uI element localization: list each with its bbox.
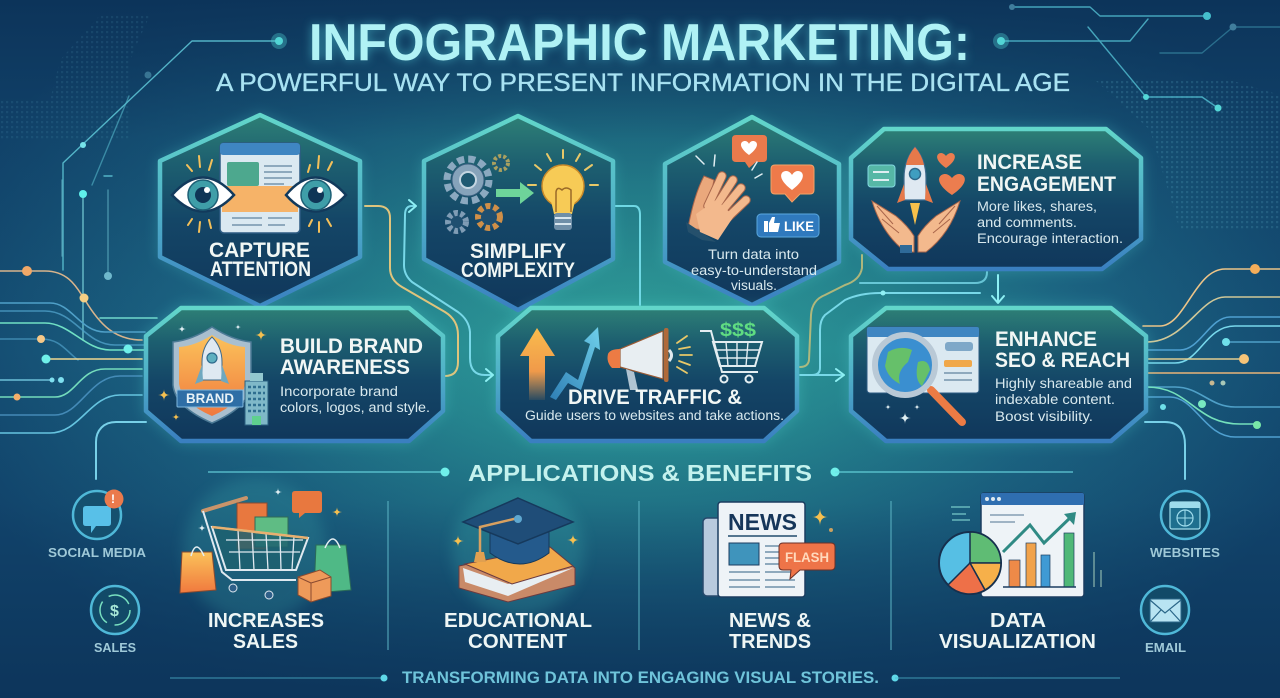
circuit lines: right side bbox=[1143, 264, 1280, 479]
section heading: applications and benefits bbox=[208, 460, 1073, 486]
icon: browser window with eyes bbox=[172, 143, 346, 233]
heading: INCREASE bbox=[977, 151, 1082, 174]
label: websites: WEBSITES bbox=[1150, 545, 1220, 560]
heading: BUILD BRAND bbox=[280, 335, 423, 358]
label: sales: SALES bbox=[94, 640, 136, 655]
circuit lines: left side bbox=[0, 180, 157, 479]
icon: brand shield with rocket bbox=[158, 324, 268, 425]
icon: rocket and hands bbox=[868, 147, 965, 253]
panel: turn data into visuals bbox=[663, 115, 841, 307]
heading line 2: AWARENESS bbox=[280, 356, 410, 379]
icon: gears and light bulb bbox=[447, 150, 598, 231]
label: increases sales: SALES bbox=[233, 631, 298, 653]
panel: build brand awareness bbox=[143, 305, 446, 444]
label: increases sales: INCREASES bbox=[208, 610, 324, 632]
body text bbox=[691, 247, 817, 293]
icon: megaphone bbox=[608, 328, 692, 390]
heading line 2: ENGAGEMENT bbox=[977, 173, 1116, 196]
heading: CAPTURE bbox=[209, 239, 310, 262]
icon: newspaper with flash bubble bbox=[703, 502, 835, 597]
heading: DRIVE TRAFFIC & bbox=[568, 386, 742, 409]
label: data visualization: VISUALIZATION bbox=[939, 631, 1096, 653]
heading line 2: ATTENTION bbox=[210, 258, 311, 281]
label: data visualization: DATA bbox=[990, 610, 1046, 632]
body text: Incorporate brand bbox=[280, 384, 398, 399]
body text: Turn data into bbox=[708, 247, 799, 262]
body text: Boost visibility. bbox=[995, 409, 1093, 424]
label: educational content: CONTENT bbox=[468, 631, 567, 653]
icon: email circle bbox=[1141, 586, 1189, 634]
icon: up arrow and trend bbox=[520, 327, 600, 400]
icon: social media circle: ! bbox=[111, 492, 115, 506]
label: news and trends: TRENDS bbox=[729, 631, 811, 653]
icon: graduation cap on book bbox=[452, 484, 584, 616]
heading: SIMPLIFY bbox=[470, 240, 566, 263]
heading line 2: COMPLEXITY bbox=[461, 259, 575, 282]
body text: More likes, shares, bbox=[977, 199, 1097, 214]
section heading: applications and benefits: APPLICATIONS & BENEFITS bbox=[468, 460, 812, 486]
icon: websites circle bbox=[1161, 491, 1209, 539]
label: email: EMAIL bbox=[1145, 640, 1186, 655]
body text: Encourage interaction. bbox=[977, 231, 1123, 246]
body text: colors, logos, and style. bbox=[280, 400, 430, 415]
subtitle: A POWERFUL WAY TO PRESENT INFORMATION IN THE DIGITAL AGE bbox=[216, 69, 1070, 97]
body text: Highly shareable and bbox=[995, 376, 1132, 391]
tagline bbox=[170, 668, 1120, 687]
body text: and comments. bbox=[977, 215, 1077, 230]
heading: ENHANCE bbox=[995, 328, 1097, 351]
dollar signs: $$$ bbox=[720, 320, 756, 341]
panel: capture attention bbox=[158, 113, 362, 308]
body text: Guide users to websites and take actions. bbox=[525, 408, 784, 423]
panel: increase engagement bbox=[848, 126, 1144, 272]
brand label: BRAND bbox=[186, 390, 234, 406]
body text bbox=[280, 384, 430, 415]
body text bbox=[977, 199, 1123, 246]
icon: shopping cart and bags bbox=[180, 478, 351, 622]
icon: social media circle bbox=[73, 490, 124, 539]
circuit lines: top right bbox=[993, 4, 1280, 112]
body text: visuals. bbox=[731, 278, 777, 293]
panel: drive traffic bbox=[495, 305, 800, 444]
icon: shopping cart with dollars bbox=[700, 320, 762, 382]
tagline: TRANSFORMING DATA INTO ENGAGING VISUAL STORIES. bbox=[402, 668, 879, 687]
icon: sales circle: $ bbox=[110, 603, 119, 620]
body text: easy-to-understand bbox=[691, 263, 817, 278]
title: INFOGRAPHIC MARKETING: bbox=[309, 14, 970, 72]
icon: dashboard chart with pie bbox=[939, 493, 1101, 597]
icon: clapping hands, hearts, like bbox=[686, 135, 819, 242]
panel: enhance seo and reach bbox=[848, 305, 1149, 444]
connector arrows between panels bbox=[365, 200, 1004, 381]
label: social media: SOCIAL MEDIA bbox=[48, 545, 147, 560]
label: educational content bbox=[444, 610, 592, 653]
icon: browser and magnifying globe bbox=[867, 327, 979, 424]
flash label: FLASH bbox=[785, 549, 829, 565]
body text: indexable content. bbox=[995, 392, 1115, 407]
like label: LIKE bbox=[784, 219, 814, 234]
label: news and trends bbox=[729, 610, 811, 653]
title: INFOGRAPHIC MARKETING: bbox=[309, 14, 970, 72]
news masthead: NEWS bbox=[728, 509, 797, 535]
panel: simplify complexity bbox=[422, 114, 615, 312]
label: news and trends: NEWS & bbox=[729, 610, 811, 632]
icon: sales circle bbox=[91, 586, 139, 634]
label: data visualization bbox=[939, 610, 1096, 653]
label: educational content: EDUCATIONAL bbox=[444, 610, 592, 632]
heading line 2: SEO & REACH bbox=[995, 349, 1130, 372]
circuit lines: top left bbox=[63, 33, 287, 270]
label: increases sales bbox=[208, 610, 324, 653]
body text bbox=[995, 376, 1132, 424]
